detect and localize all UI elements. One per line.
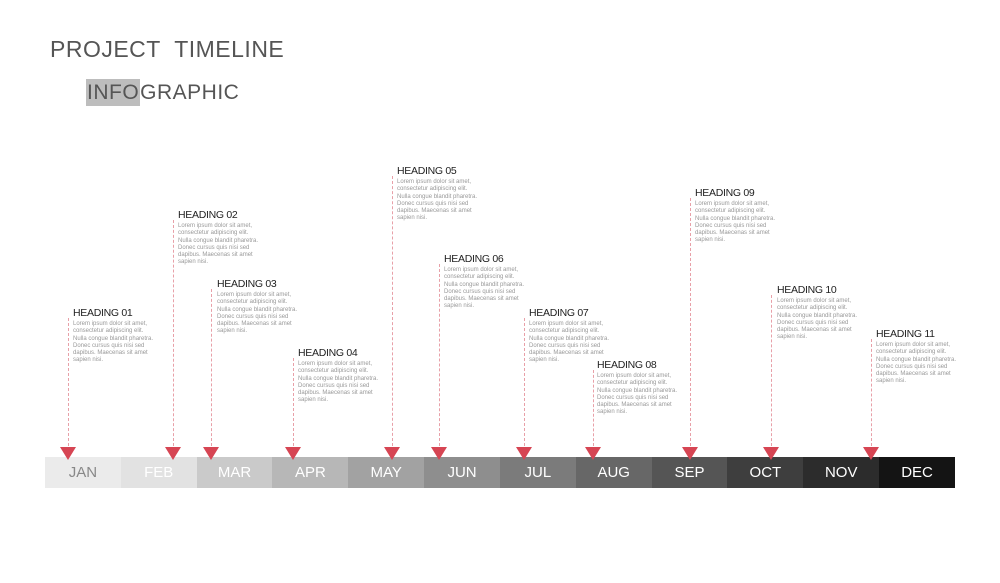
dashed connector lines [68,176,872,446]
heading 05 [397,165,477,221]
heading 03: HEADING 03 [217,278,276,290]
month bar: APR [295,464,326,481]
heading 08: sapien nisi. [597,409,627,415]
heading 02: Donec cursus quis nisi sed [178,245,249,251]
heading 02: Nulla congue blandit pharetra. [178,238,258,244]
heading 07: Nulla congue blandit pharetra. [529,336,609,342]
heading 04: Nulla congue blandit pharetra. [298,376,378,382]
heading 05: HEADING 05 [397,165,456,177]
heading 03: sapien nisi. [217,328,247,334]
heading 09: Donec cursus quis nisi sed [695,223,766,229]
heading 09: HEADING 09 [695,187,754,199]
heading 06: dapibus. Maecenas sit amet [444,296,519,302]
heading 04 [298,347,378,403]
heading 06: Donec cursus quis nisi sed [444,289,515,295]
heading 11: dapibus. Maecenas sit amet [876,371,951,377]
heading 04: Lorem ipsum dolor sit amet, [298,361,372,367]
heading 10: Lorem ipsum dolor sit amet, [777,298,851,304]
heading 06: Nulla congue blandit pharetra. [444,282,524,288]
heading 03: consectetur adipiscing elit. [217,299,287,305]
heading 09: consectetur adipiscing elit. [695,208,765,214]
heading 08: Lorem ipsum dolor sit amet, [597,373,671,379]
heading 09: Lorem ipsum dolor sit amet, [695,201,769,207]
heading 03: Lorem ipsum dolor sit amet, [217,292,291,298]
heading 11: HEADING 11 [876,328,935,340]
heading 09: dapibus. Maecenas sit amet [695,230,770,236]
heading 10: dapibus. Maecenas sit amet [777,327,852,333]
month bar: OCT [750,464,781,481]
heading 11: sapien nisi. [876,378,906,384]
subtitle: INFOGRAPHIC [87,81,239,104]
heading 01: HEADING 01 [73,307,132,319]
heading 05: Lorem ipsum dolor sit amet, [397,179,471,185]
heading 01: sapien nisi. [73,357,103,363]
heading 11 [876,328,956,384]
heading 04: HEADING 04 [298,347,357,359]
month bar: AUG [597,464,630,481]
heading 10: Nulla congue blandit pharetra. [777,313,857,319]
heading 10: consectetur adipiscing elit. [777,305,847,311]
month bar: JAN [69,464,97,481]
heading 04: consectetur adipiscing elit. [298,368,368,374]
heading 08 [597,359,677,415]
heading 09: Nulla congue blandit pharetra. [695,216,775,222]
heading 05: Donec cursus quis nisi sed [397,201,468,207]
heading 05: dapibus. Maecenas sit amet [397,208,472,214]
heading 01: Nulla congue blandit pharetra. [73,336,153,342]
heading 10: sapien nisi. [777,334,807,340]
month bar [45,457,955,488]
heading 01: dapibus. Maecenas sit amet [73,350,148,356]
heading 08: consectetur adipiscing elit. [597,380,667,386]
month bar: MAR [218,464,251,481]
heading 04: Donec cursus quis nisi sed [298,383,369,389]
month bar: MAY [371,464,402,481]
heading 03: dapibus. Maecenas sit amet [217,321,292,327]
heading 07: consectetur adipiscing elit. [529,328,599,334]
heading 02: sapien nisi. [178,259,208,265]
heading 03: Donec cursus quis nisi sed [217,314,288,320]
heading 03: Nulla congue blandit pharetra. [217,307,297,313]
heading 11: Nulla congue blandit pharetra. [876,357,956,363]
month bar: FEB [144,464,173,481]
heading 09: sapien nisi. [695,237,725,243]
heading 02: dapibus. Maecenas sit amet [178,252,253,258]
marker triangles [60,447,879,460]
heading 03 [217,278,297,334]
month bar: DEC [901,464,933,481]
heading 07: dapibus. Maecenas sit amet [529,350,604,356]
heading 08: Donec cursus quis nisi sed [597,395,668,401]
heading 01: Lorem ipsum dolor sit amet, [73,321,147,327]
heading 06: HEADING 06 [444,253,503,265]
heading 10: Donec cursus quis nisi sed [777,320,848,326]
heading 06: consectetur adipiscing elit. [444,274,514,280]
heading 02: HEADING 02 [178,209,237,221]
heading 07 [529,307,609,363]
heading 04: dapibus. Maecenas sit amet [298,390,373,396]
heading 01 [73,307,153,363]
heading 07: Lorem ipsum dolor sit amet, [529,321,603,327]
heading 11: Donec cursus quis nisi sed [876,364,947,370]
month bar: SEP [675,464,705,481]
heading 11: Lorem ipsum dolor sit amet, [876,342,950,348]
heading 11: consectetur adipiscing elit. [876,349,946,355]
heading 04: sapien nisi. [298,397,328,403]
heading 07: sapien nisi. [529,357,559,363]
heading 07: HEADING 07 [529,307,588,319]
title: PROJECT TIMELINE [50,36,284,62]
month bar: JUN [447,464,477,481]
heading 05: sapien nisi. [397,215,427,221]
heading 02: Lorem ipsum dolor sit amet, [178,223,252,229]
heading 05: Nulla congue blandit pharetra. [397,194,477,200]
heading 02 [178,209,258,265]
heading 02: consectetur adipiscing elit. [178,230,248,236]
heading 07: Donec cursus quis nisi sed [529,343,600,349]
heading 09 [695,187,775,243]
heading 08: dapibus. Maecenas sit amet [597,402,672,408]
heading 08: Nulla congue blandit pharetra. [597,388,677,394]
heading 06: Lorem ipsum dolor sit amet, [444,267,518,273]
heading 08: HEADING 08 [597,359,656,371]
month bar: JUL [525,464,551,481]
heading 01: Donec cursus quis nisi sed [73,343,144,349]
heading 05: consectetur adipiscing elit. [397,186,467,192]
heading 01: consectetur adipiscing elit. [73,328,143,334]
month bar: NOV [825,464,857,481]
heading 10: HEADING 10 [777,284,836,296]
heading 10 [777,284,857,340]
heading 06: sapien nisi. [444,303,474,309]
heading 06 [444,253,524,309]
